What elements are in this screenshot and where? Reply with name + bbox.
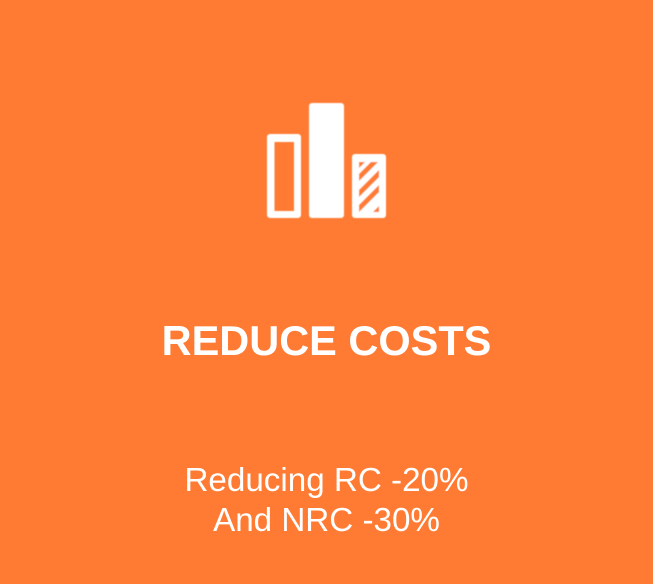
infographic card [164,102,490,532]
text line: non-recurring cost: And NRC -30% [213,502,440,539]
text line: recurring cost: Reducing RC -20% [184,462,469,499]
text block: cost reductions [184,462,469,539]
heading: REDUCE COSTS [162,317,491,364]
icon: hatched right bar [352,154,386,218]
icon: outlined left bar [267,134,301,218]
icon: solid middle bar [309,103,344,218]
icon: bar chart [267,103,386,218]
